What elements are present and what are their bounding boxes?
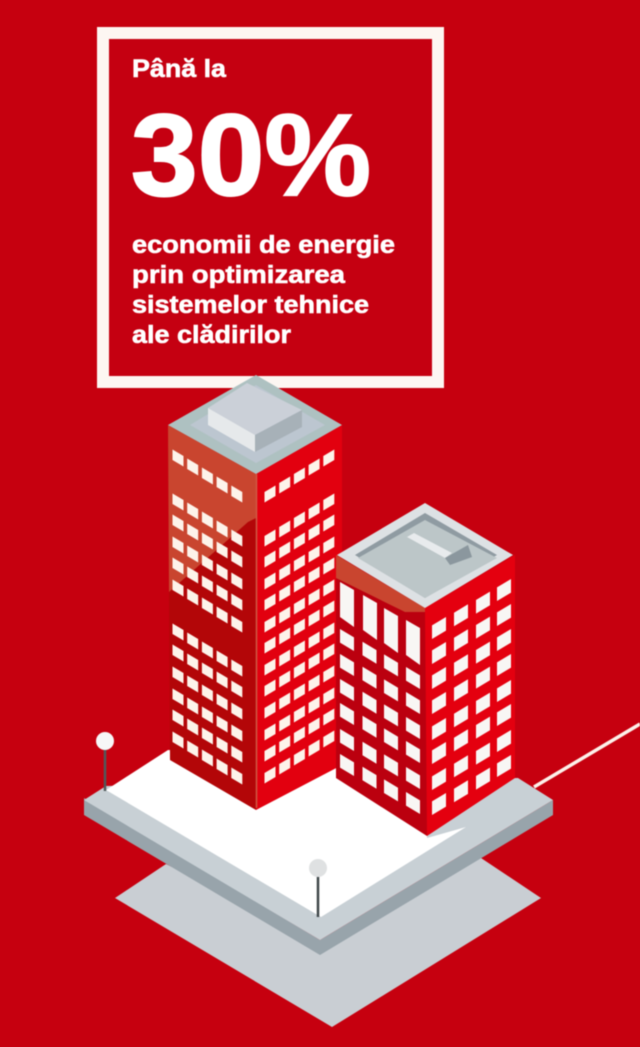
windows: right face (264, 450, 334, 784)
connector line (534, 724, 640, 787)
roof (168, 375, 342, 474)
platform (84, 750, 553, 955)
text: description (132, 231, 395, 349)
windows: left face (340, 582, 420, 814)
text: intro: Până la (132, 55, 227, 83)
building: short tower (336, 503, 515, 836)
building: tall tower (168, 375, 342, 810)
right face (256, 425, 342, 810)
text: description: sistemelor tehnice (132, 291, 369, 319)
ground shadow plate (115, 858, 541, 1027)
text: description: ale clădirilor (132, 321, 291, 349)
right face (425, 555, 515, 836)
windows: left face (172, 450, 242, 784)
street lamp: back left (96, 732, 114, 791)
text: description: prin optimizarea (132, 261, 346, 289)
roof (337, 503, 513, 608)
left face (168, 425, 256, 810)
street lamp: front (309, 859, 327, 917)
text: description: economii de energie (132, 231, 395, 259)
left face (336, 555, 427, 836)
callout box: energy savings (103, 33, 438, 382)
text: big number: 30% (131, 90, 371, 220)
windows: right face (432, 579, 511, 815)
